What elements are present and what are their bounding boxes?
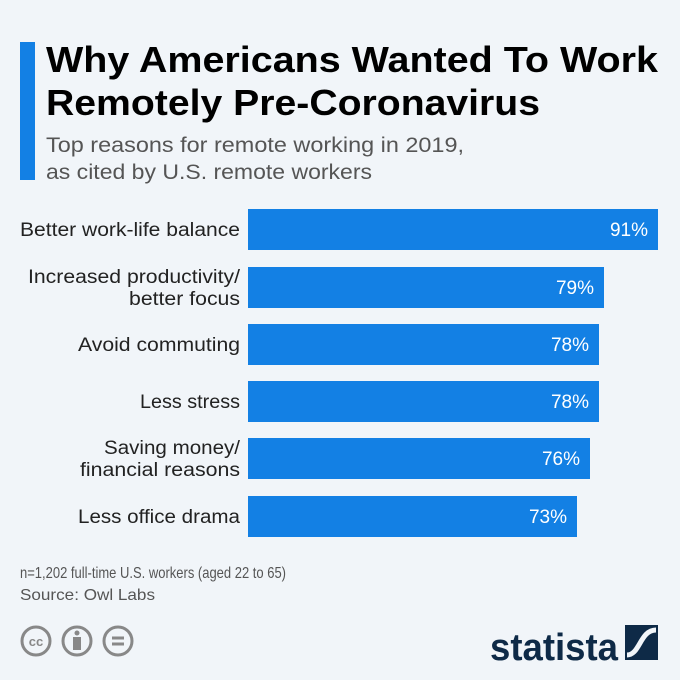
icons: license: cc [29, 634, 43, 649]
bar: less stress: Less stress [140, 392, 240, 413]
bar: productivity: 79% [556, 278, 594, 299]
bar: better work-life balance: Better work-life balance [20, 220, 240, 241]
bar: productivity [28, 267, 604, 310]
title: Remotely Pre-Coronavirus [46, 82, 540, 123]
bar: saving money: financial reasons [80, 460, 240, 481]
bar: productivity: better focus [129, 289, 240, 310]
bar: better work-life balance [20, 209, 658, 250]
bar: productivity: Increased productivity/ [28, 267, 241, 288]
bar: avoid commuting: 78% [551, 335, 589, 356]
bar: better work-life balance: 91% [610, 220, 648, 241]
bar: less stress: 78% [551, 392, 589, 413]
bar: less office drama: Less office drama [78, 507, 240, 528]
bar: less stress [140, 381, 599, 422]
subtitle: Top reasons for remote working in 2019, [46, 134, 464, 157]
footer notes: n=1,202 full-time U.S. workers (aged 22 to 65) [20, 565, 286, 582]
subtitle [46, 134, 464, 184]
bar: saving money [80, 438, 590, 481]
bar: avoid commuting [78, 324, 599, 365]
title: Why Americans Wanted To Work [46, 39, 659, 80]
bar: saving money: 76% [542, 449, 580, 470]
footer notes: Source: Owl Labs [20, 587, 155, 604]
footer notes [20, 565, 286, 604]
bar: avoid commuting: Avoid commuting [78, 335, 240, 356]
bar: less office drama [78, 496, 577, 537]
subtitle: as cited by U.S. remote workers [46, 161, 372, 184]
bar: saving money: Saving money/ [104, 438, 241, 459]
accent bar [20, 42, 35, 180]
title [46, 39, 659, 123]
bar: less office drama: 73% [529, 507, 567, 528]
statista logo: statista [490, 627, 619, 669]
bar chart [20, 209, 658, 537]
icons: license [22, 627, 132, 655]
